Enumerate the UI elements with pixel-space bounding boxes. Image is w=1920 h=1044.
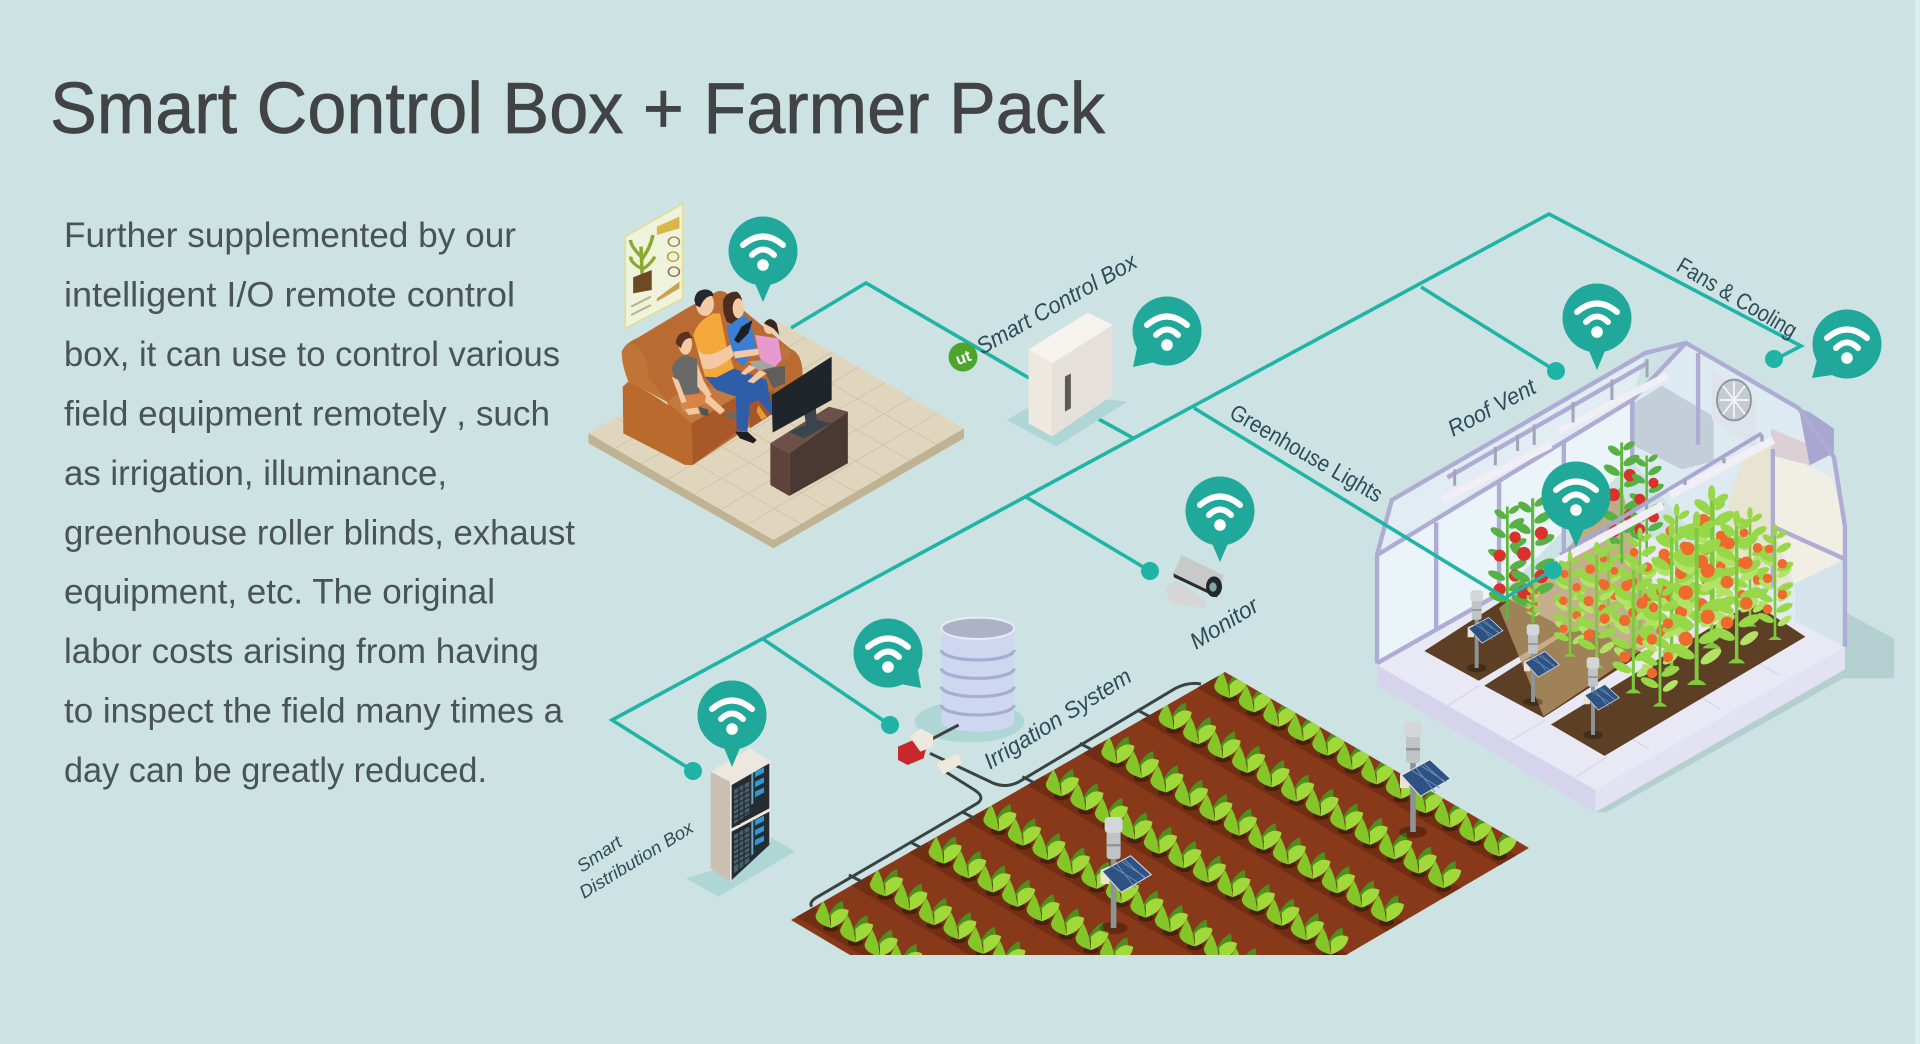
grow light beam bbox=[1499, 486, 1658, 716]
valve bbox=[898, 728, 962, 775]
sensor: field east bbox=[1399, 721, 1451, 838]
back glass wall bbox=[1377, 343, 1845, 663]
tomato plants: lit rows bbox=[1526, 485, 1795, 707]
text block: description: labor costs arising from having bbox=[64, 632, 539, 671]
text block: description: Further supplemented by our bbox=[64, 216, 516, 255]
exhaust fan bbox=[1712, 369, 1756, 449]
frame bbox=[1377, 343, 1845, 663]
poster bbox=[625, 204, 683, 328]
cooling unit bbox=[1771, 408, 1834, 465]
text block: description: day can be greatly reduced. bbox=[64, 751, 487, 790]
person: girl bbox=[741, 319, 792, 388]
person: boy bbox=[672, 332, 737, 420]
panel: greenhouse bbox=[1377, 343, 1894, 812]
roof lamps bbox=[1442, 359, 1667, 500]
greenhouse sensors bbox=[1467, 590, 1619, 739]
greenhouse shadow bbox=[1595, 612, 1894, 812]
text block: description: as irrigation, illuminance, bbox=[64, 454, 447, 493]
text block: description: field equipment remotely , such bbox=[64, 394, 550, 434]
label: Fans & Cooling: Fans & Cooling bbox=[1672, 252, 1802, 343]
label: Roof Vent: Roof Vent bbox=[1443, 373, 1541, 441]
logo badge: ut bbox=[954, 348, 974, 369]
panel: water tank and irrigation pipes bbox=[811, 618, 1201, 907]
soil furrows bbox=[796, 678, 1516, 955]
label: Smart Distribution Box: Distribution Box bbox=[576, 817, 698, 902]
text block: description: intelligent I/O remote control bbox=[64, 276, 515, 314]
panel: family living room bbox=[588, 204, 964, 548]
text block: description: greenhouse roller blinds, exhaust bbox=[64, 514, 575, 552]
wifi bubble: control box bbox=[1132, 296, 1202, 367]
label: Greenhouse Lights: Greenhouse Lights bbox=[1226, 399, 1387, 507]
floor bbox=[588, 322, 964, 548]
water tank bbox=[941, 618, 1014, 732]
tomato plants: rear bbox=[1487, 439, 1665, 627]
platform bbox=[1377, 522, 1845, 812]
tv cabinet bbox=[770, 407, 848, 496]
television bbox=[772, 357, 832, 438]
title: Smart Control Box + Farmer Pack bbox=[50, 69, 1106, 149]
person: mother bbox=[723, 292, 760, 367]
network lines bbox=[612, 214, 1801, 780]
text block: description bbox=[64, 216, 575, 790]
label: Smart Distribution Box: Smart bbox=[573, 831, 627, 876]
text block: description: equipment, etc. The original bbox=[64, 572, 495, 612]
label: Monitor: Monitor bbox=[1185, 591, 1264, 654]
smart distribution box bbox=[686, 748, 795, 897]
sofa bbox=[622, 291, 803, 465]
wifi bubble: fans bbox=[1812, 310, 1882, 378]
label: Smart Control Box: Smart Control Box bbox=[972, 247, 1142, 359]
wifi bubble: monitor bbox=[1186, 476, 1254, 562]
wifi bubble: irrigation bbox=[854, 618, 922, 688]
text block: description: box, it can use to control various bbox=[64, 335, 560, 374]
panel: irrigation field bbox=[791, 672, 1529, 955]
front rail and lamp bbox=[1557, 433, 1773, 562]
soil beds bbox=[1424, 598, 1805, 756]
wifi bubble: family bbox=[728, 216, 798, 302]
person: father bbox=[693, 289, 773, 443]
wifi bubble: distribution box bbox=[698, 680, 766, 767]
sensor: field west bbox=[1100, 817, 1151, 934]
text block: description: to inspect the field many times a bbox=[64, 692, 564, 730]
tank shadow bbox=[915, 701, 1024, 742]
logo badge bbox=[948, 342, 978, 372]
crop rows bbox=[816, 673, 1516, 955]
label: Irrigation System: Irrigation System bbox=[979, 663, 1136, 774]
wifi bubble: lights bbox=[1542, 462, 1610, 547]
smart control box bbox=[1007, 313, 1127, 447]
wifi bubble: roof vent bbox=[1562, 284, 1632, 370]
irrigation pipes bbox=[811, 683, 1201, 907]
monitor camera bbox=[1165, 555, 1223, 608]
